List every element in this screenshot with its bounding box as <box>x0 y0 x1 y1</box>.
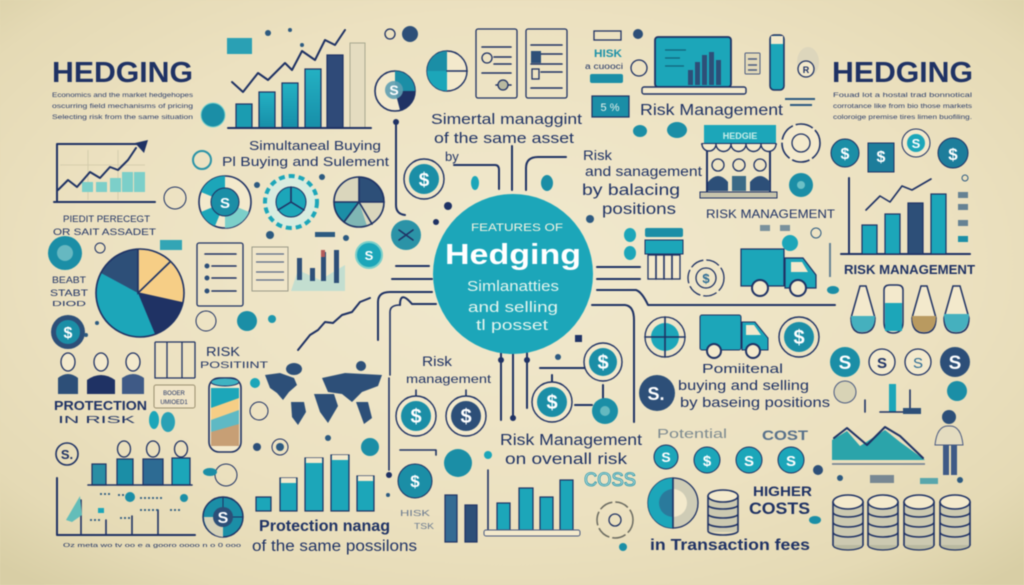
text: hisk tsk <box>400 508 434 531</box>
title: right HEDGING: HEDGING <box>832 57 973 89</box>
chart: people bars <box>88 441 192 485</box>
text block: potential buying and selling: by baseing positions <box>680 394 830 410</box>
chart: framed line chart <box>54 140 155 202</box>
text block: risk management overall risk <box>500 432 643 468</box>
icon: dollar coin <box>404 159 444 199</box>
text block: protection manag: Protection nanag <box>259 518 390 535</box>
icon: columns <box>155 342 195 378</box>
icon: navy dot <box>385 26 418 42</box>
small gauges <box>834 381 967 414</box>
text: hisk tsk: HISK <box>400 508 430 518</box>
text block: risk position <box>200 344 268 371</box>
text block: risk management left-center: Risk <box>422 353 453 369</box>
text block: right description <box>833 92 973 121</box>
icon: list document <box>197 243 243 306</box>
icon: dollar outline coin <box>56 443 78 465</box>
text: subtitle: Simlanatties <box>467 278 559 295</box>
icon: layered cylinder <box>209 378 241 452</box>
text: subtitle: and selling <box>468 299 558 316</box>
label box: UMIOED1 <box>160 400 188 406</box>
label box: BOOER <box>163 391 186 397</box>
icon: percent tag <box>592 96 629 117</box>
icon: dollar gear coin <box>51 315 85 349</box>
text block: simultaneal buying: Simultaneal Buying <box>249 138 381 153</box>
text block: simultaneal buying <box>222 138 389 169</box>
icon: report <box>252 247 288 291</box>
coins: center left: $ <box>410 472 420 491</box>
chart: five bar protection chart <box>256 455 374 511</box>
text block: higher costs: HIGHER <box>753 483 812 499</box>
row of dollar icons: $ <box>841 146 850 163</box>
text block: risk and management by balancing positions: positions <box>602 201 676 218</box>
icon: percent tag: 5 % <box>601 102 620 114</box>
icon: market stall: HEDGIE <box>723 131 757 141</box>
right coins row: S <box>877 355 887 372</box>
icon: calculator <box>745 53 760 74</box>
right coins row: S <box>913 355 923 372</box>
text block: potential buying and selling: Pomiitenal <box>702 361 783 376</box>
text block: left description: Selecting risk from the same situation <box>52 114 193 121</box>
chart: large pie <box>96 249 184 337</box>
icon: gear lock <box>782 124 820 162</box>
chart: mountain area <box>832 427 925 464</box>
icon: gear pie <box>265 176 317 228</box>
heading: risk management middle: RISK MANAGEMENT <box>706 207 836 221</box>
chart: center bottom bars <box>484 470 580 536</box>
text block: potential cost <box>657 426 809 443</box>
icon: dollar circle pie: S <box>389 82 399 98</box>
text block: left description <box>52 92 194 121</box>
icon: coin stacks <box>833 495 970 550</box>
text: features of: FEATURES OF <box>471 222 563 234</box>
text block: beast start: STABT <box>50 288 89 298</box>
coin row: potential cost: S <box>786 453 796 470</box>
coins: center left: $ <box>460 406 472 428</box>
text block: potential buying and selling: buying and selling <box>678 377 809 393</box>
icon: cross coin <box>391 220 421 250</box>
panel: left header <box>52 57 194 121</box>
icon: standing person <box>935 410 963 475</box>
text block: protection in risk: PROTECTION <box>54 398 147 413</box>
icon: dollar coin truck: $ <box>793 327 805 349</box>
text block: protection in risk <box>54 398 147 426</box>
icon: dollar circle pie <box>375 71 415 111</box>
icon: document two <box>526 29 567 98</box>
icon: gear dollar: $ <box>702 271 710 286</box>
text block: simertal managgint <box>431 111 583 147</box>
text block: credit percent: PIEDIT PERECEGT <box>63 214 150 225</box>
text block: protection manag: of the same possilons <box>252 538 417 555</box>
row of dollar icons: $ <box>948 145 958 164</box>
text block: simultaneal buying: Pl Buying and Sulement <box>222 154 389 169</box>
text block: potential buying and selling <box>678 361 830 410</box>
text: subtitle: tl posset <box>476 317 549 334</box>
coin row: potential cost: S <box>744 453 754 470</box>
text block: risk and management by balancing positions <box>582 147 702 218</box>
text block: right description: corrotance like from bio those markets <box>833 103 973 110</box>
icon: dollar coin truck <box>779 317 819 357</box>
chart: tall navy bars <box>445 495 477 542</box>
text: subtitle <box>467 278 559 334</box>
coins: center left: $ <box>410 406 422 428</box>
text block: right description: Fouad lot a hostal trad bonnotical <box>833 92 973 99</box>
text block: risk and management by balancing positions: by balacing <box>582 182 680 199</box>
chart: lower left axis chart <box>57 478 195 535</box>
text block: risk management overall risk: Risk Management <box>500 432 643 449</box>
chart: top rising bar chart <box>228 30 371 128</box>
text block: beast start <box>50 275 89 308</box>
icon: gear G <box>597 502 633 538</box>
icon: knob <box>797 47 819 77</box>
icon: gear dollar <box>688 260 724 296</box>
coin cluster <box>532 343 622 424</box>
icon: dollar coin: $ <box>419 170 430 191</box>
icon: S coin <box>356 242 382 268</box>
text block: risk and management by balancing positions: and sanagement <box>585 163 702 179</box>
chart: pie <box>334 177 384 227</box>
icon: risk tag cluster <box>585 29 647 83</box>
text block: left description: Economics and the market hedgehopes <box>52 92 194 99</box>
icon: delivery truck one <box>741 249 816 296</box>
icon: balloon <box>789 173 813 197</box>
icon: dollar split coin <box>203 497 243 537</box>
icon: machine <box>645 228 683 279</box>
chart: candlestick bars <box>291 250 345 291</box>
chart: small pie <box>427 51 467 91</box>
text block: risk position: POSITIINT <box>200 360 268 371</box>
text block: potential cost: Potential <box>657 426 727 441</box>
coin cluster: $ <box>546 392 558 414</box>
icon: risk tag cluster: HISK <box>594 48 622 60</box>
icon: flasks <box>851 285 969 333</box>
text: hisk tsk: TSK <box>414 521 434 531</box>
text block: credit percent <box>53 214 156 238</box>
text block: simertal managgint: of the same asset <box>434 130 575 147</box>
text block: protection in risk: IN RISK <box>58 415 136 426</box>
text block: protection manag <box>252 518 417 555</box>
panel: right header <box>832 57 973 121</box>
icon: navy S coin <box>639 375 675 411</box>
icon: S coin: S <box>365 248 374 263</box>
text: in transaction fees: in Transaction fees <box>650 537 810 554</box>
icon: dollar split coin: S <box>218 510 229 527</box>
chart: right bar chart with trend <box>841 178 970 254</box>
icon: single coin stack <box>708 490 738 535</box>
right coins row: S <box>949 353 961 374</box>
icon: gear globe <box>48 236 82 270</box>
right coins row <box>830 347 970 377</box>
icon: document one <box>476 29 517 98</box>
row of dollar icons <box>831 129 968 172</box>
chart: half donut <box>648 478 698 528</box>
coins: center left <box>396 396 492 498</box>
icon: risk tag cluster: a cuooci <box>585 62 623 71</box>
text block: risk management left-center: management <box>406 374 492 386</box>
heading: risk management right: RISK MANAGEMENT <box>844 262 975 277</box>
icon: market stall <box>700 125 777 198</box>
text block: right description: coloroige premise tires limen buofiling. <box>833 114 972 121</box>
text block: risk management left-center <box>406 353 492 386</box>
icon: tube <box>770 35 784 90</box>
icon: three business people <box>58 353 144 394</box>
text block: higher costs: COSTS <box>749 499 810 518</box>
text block: beast start: BEABT <box>52 275 87 285</box>
coin row: potential cost: S <box>661 449 671 465</box>
center circle: features of hedging <box>433 194 593 354</box>
title: left HEDGING: HEDGING <box>52 57 193 89</box>
icon: target wheel <box>645 317 685 357</box>
text block: simertal managgint: Simertal managgint <box>431 111 583 128</box>
label box <box>154 385 195 408</box>
text: lower left footnote: Oz meta wo tv oo e a gooro oooo n o 0 ooo <box>63 543 241 549</box>
icon: dollar outline coin: S. <box>61 447 73 462</box>
icon: laptop with chart <box>642 37 746 94</box>
icon: segmented S wheel: S <box>220 195 230 212</box>
coin cluster: $ <box>597 352 609 374</box>
icon: knob: R <box>803 65 810 75</box>
icon: navy S coin: S. <box>647 384 665 404</box>
coin row: potential cost <box>654 445 804 473</box>
text: coss: COSS <box>584 470 636 491</box>
icon: teal dot <box>619 543 627 551</box>
icon: delivery truck two <box>700 315 768 358</box>
icon: segmented S wheel <box>199 176 251 228</box>
coin row: potential cost: $ <box>703 453 712 470</box>
text block: risk position: RISK <box>206 344 240 359</box>
text block: potential cost: COST <box>762 427 809 443</box>
row of dollar icons: S <box>912 136 921 151</box>
text block: left description: oscurring field mechanisms of pricing <box>52 103 194 110</box>
chart: squiggle trend <box>298 298 370 350</box>
text: by: by <box>445 149 459 164</box>
scattered decorative marks <box>84 28 968 524</box>
icon: teal dots <box>149 315 276 432</box>
connectors <box>378 119 835 478</box>
text block: risk management overall risk: on ovenall risk <box>505 451 627 468</box>
right coins row: S <box>839 353 851 374</box>
text block: risk and management by balancing positions: Risk <box>583 147 613 163</box>
heading: risk management top: Risk Management <box>640 102 784 119</box>
icon: dollar gear coin: $ <box>64 325 73 342</box>
text block: higher costs <box>749 483 812 518</box>
text block: credit percent: OR SAIT ASSADET <box>53 227 156 238</box>
row of dollar icons: $ <box>877 149 886 166</box>
text: hedging: Hedging <box>445 239 581 271</box>
text block: beast start: DIOD <box>52 301 86 308</box>
icon: world map <box>265 361 382 425</box>
